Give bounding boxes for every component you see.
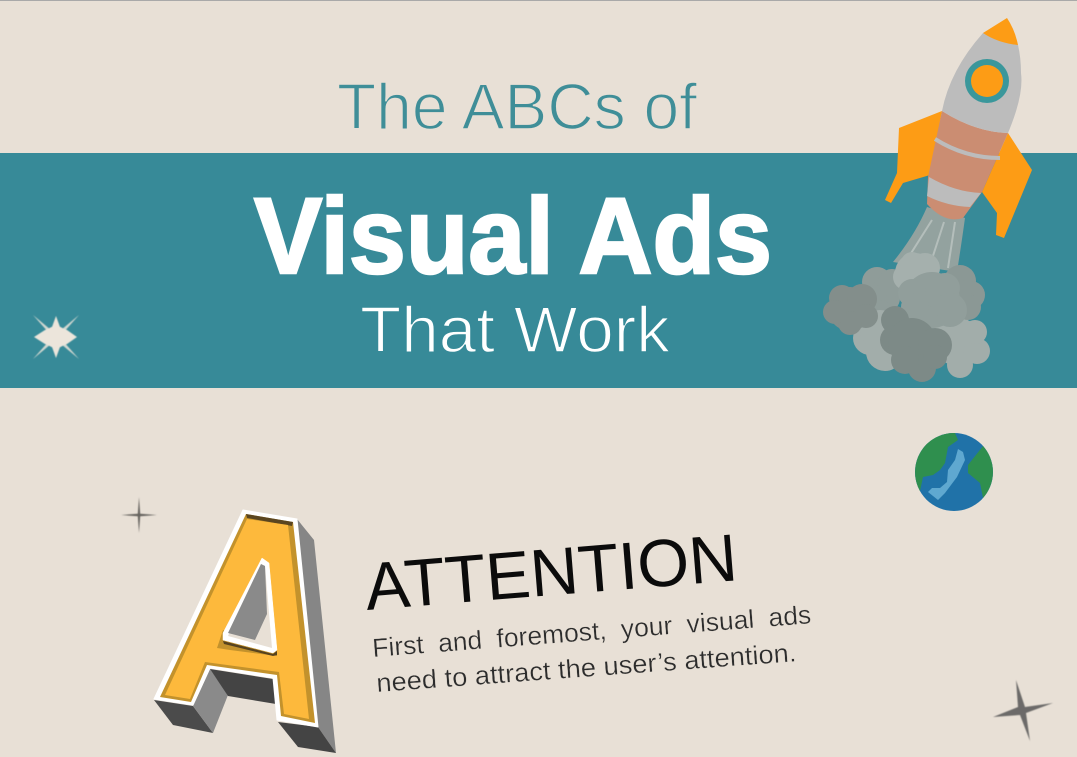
letter A crossbar underside — [210, 669, 276, 704]
text block: attention description: need to attract the user’s attention. — [375, 637, 797, 698]
title line: The ABCs of: The ABCs of — [337, 71, 698, 143]
rocket nose — [983, 18, 1018, 45]
text block: attention description: First and foremost, your visual ads — [371, 599, 812, 663]
rocket window — [965, 59, 1009, 103]
letter A left foot — [154, 700, 213, 733]
icon: rocket with smoke — [823, 18, 1032, 382]
rocket exhaust — [893, 207, 965, 272]
letter A counter shadow — [217, 630, 277, 656]
letter A right side extrusion — [297, 519, 336, 753]
letter A dark edge — [160, 514, 315, 723]
icon: small sparkle — [121, 497, 157, 533]
rocket right fin — [982, 133, 1032, 238]
icon: earth — [915, 433, 993, 511]
teal title band — [0, 153, 1077, 388]
letter A inner leg — [193, 669, 228, 733]
rocket stripes — [927, 139, 1000, 207]
icon: white starburst — [33, 315, 79, 359]
icon: large sparkle — [993, 680, 1053, 741]
rocket left fin — [885, 111, 942, 203]
text block: attention description — [371, 599, 812, 698]
rocket copper section — [927, 111, 1008, 219]
title line: That Work: That Work — [360, 293, 671, 366]
smoke clouds — [823, 252, 990, 382]
letter A white outline — [154, 510, 318, 727]
title line: Visual Ads: Visual Ads — [254, 175, 772, 296]
letter A right foot — [278, 722, 336, 753]
letter A yellow face — [165, 519, 309, 719]
letter A counter — [223, 558, 277, 656]
heading: ATTENTION: ATTENTION — [362, 520, 740, 625]
icon: 3D letter A — [154, 510, 336, 753]
rocket body — [942, 32, 1021, 133]
